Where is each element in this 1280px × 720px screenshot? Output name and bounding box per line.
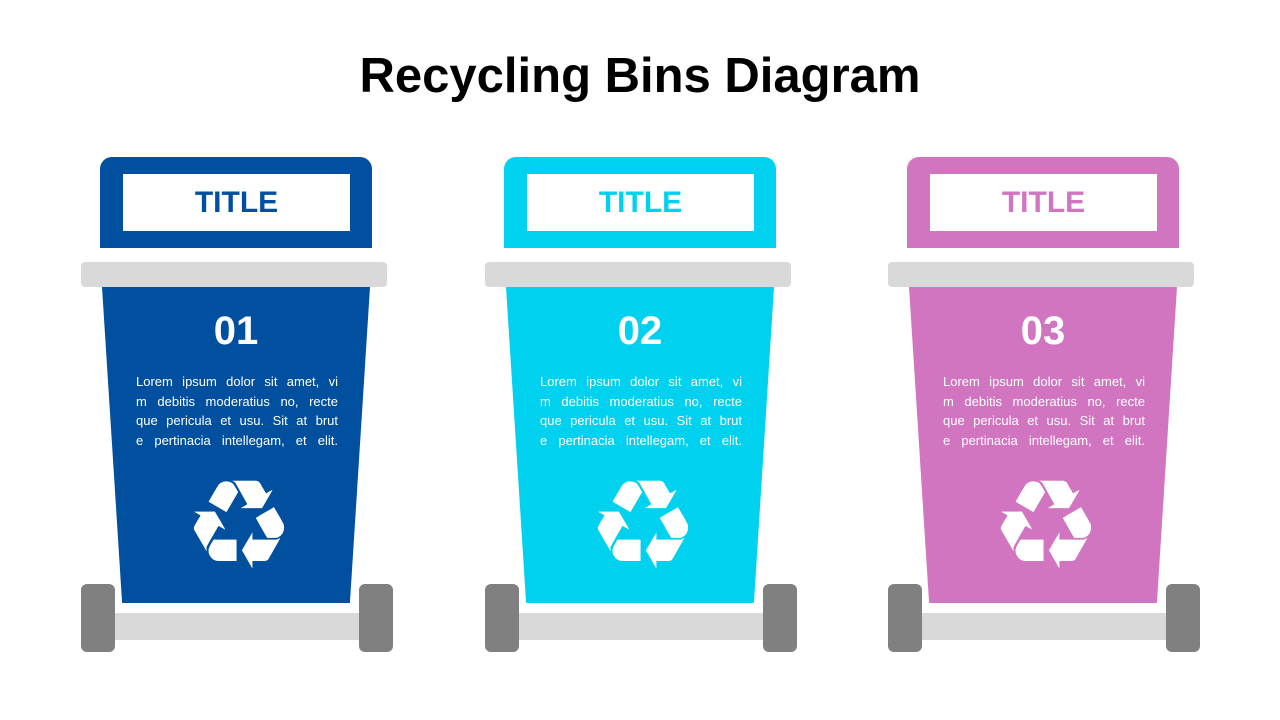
label 1: TITLE — [195, 186, 278, 219]
text 3: que pericula et usu. Sit at brut — [943, 413, 1145, 428]
text 3: Lorem ipsum dolor sit amet, vi — [943, 374, 1145, 389]
number 3: 03 — [1021, 309, 1065, 353]
text 1: e pertinacia intellegam, et elit. — [136, 432, 338, 448]
lid 3 — [907, 157, 1179, 248]
text 2 — [540, 374, 742, 448]
icon: recycle 3: ♻ — [990, 454, 1102, 598]
body 2 — [506, 287, 774, 603]
wheel right 3 — [1166, 584, 1200, 652]
bin 1: blue — [81, 157, 393, 652]
bin 2: cyan — [485, 157, 797, 652]
bin 3: pink — [888, 157, 1200, 652]
lid 2 — [504, 157, 776, 248]
text 2: que pericula et usu. Sit at brut — [540, 413, 742, 428]
label 1 — [123, 174, 350, 231]
number 1: 01 — [214, 309, 258, 353]
text 2: Lorem ipsum dolor sit amet, vi — [540, 374, 742, 389]
title: Recycling Bins Diagram — [360, 49, 920, 103]
wheel right 2 — [763, 584, 797, 652]
body 1 — [102, 287, 370, 603]
body 3 — [909, 287, 1177, 603]
text 2: e pertinacia intellegam, et elit. — [540, 432, 742, 448]
icon: recycle 2: ♻ — [587, 454, 699, 598]
axle 3 — [922, 613, 1167, 640]
text 1 — [136, 374, 338, 448]
text 1: Lorem ipsum dolor sit amet, vi — [136, 374, 338, 389]
lid 1 — [100, 157, 372, 248]
label 2 — [527, 174, 754, 231]
rim 2 — [485, 262, 791, 287]
text 3 — [943, 374, 1145, 448]
axle 1 — [115, 613, 360, 640]
text 2: m debitis moderatius no, recte — [540, 394, 742, 408]
rim 1 — [81, 262, 387, 287]
rim 3 — [888, 262, 1194, 287]
wheel right 1 — [359, 584, 393, 652]
number 2: 02 — [618, 309, 662, 353]
label 3: TITLE — [1002, 186, 1085, 219]
text 3: e pertinacia intellegam, et elit. — [943, 432, 1145, 448]
axle 2 — [519, 613, 764, 640]
icon: recycle 1: ♻ — [183, 454, 295, 598]
wheel left 3 — [888, 584, 922, 652]
wheel left 2 — [485, 584, 519, 652]
wheel left 1 — [81, 584, 115, 652]
text 1: m debitis moderatius no, recte — [136, 394, 338, 408]
label 2: TITLE — [599, 186, 682, 219]
text 3: m debitis moderatius no, recte — [943, 394, 1145, 408]
label 3 — [930, 174, 1157, 231]
text 1: que pericula et usu. Sit at brut — [136, 413, 338, 428]
